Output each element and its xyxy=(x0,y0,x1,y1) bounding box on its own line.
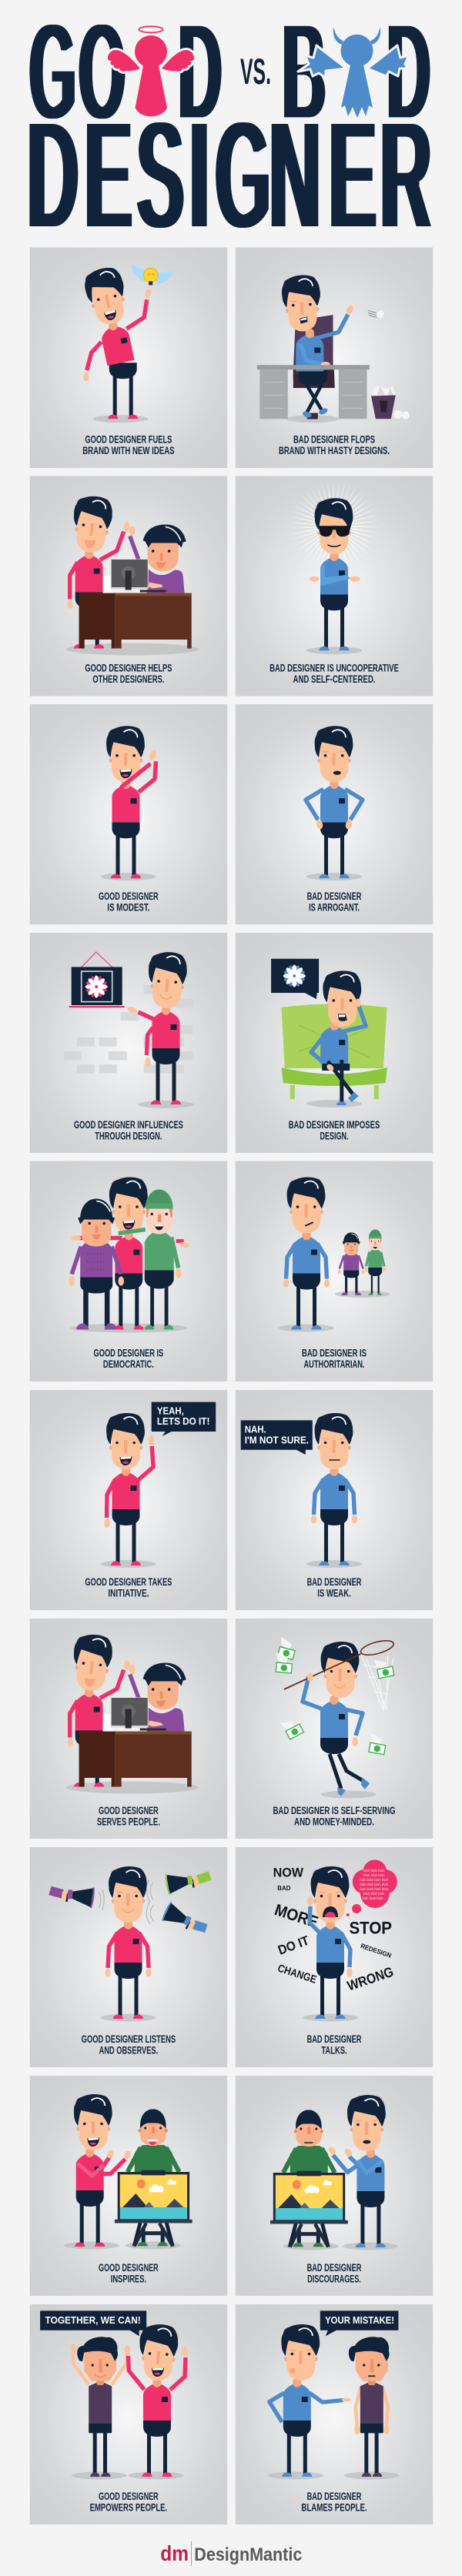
caption: IS MODEST. xyxy=(107,901,149,913)
caption: SERVES PEOPLE. xyxy=(97,1816,160,1827)
panel: bad designer imposes design xyxy=(236,933,433,1153)
caption: BRAND WITH HASTY DESIGNS. xyxy=(279,445,390,456)
caption: DESIGN. xyxy=(320,1130,348,1141)
scattered shouted words: REDESIGN xyxy=(360,1942,393,1960)
caption: BAD DESIGNER xyxy=(307,890,362,902)
caption: TALKS. xyxy=(321,2044,347,2056)
caption: IS ARROGANT. xyxy=(309,901,360,913)
caption: GOOD DESIGNER xyxy=(99,1805,159,1816)
speech bubble xyxy=(320,2310,398,2336)
caption: AND MONEY-MINDED. xyxy=(294,1816,374,1827)
logo: DesignMantic: DesignMantic xyxy=(194,2544,302,2565)
illustration: designer encouraging student at easel xyxy=(64,2094,192,2249)
panel: bad designer is uncooperative and self-centered xyxy=(236,476,433,696)
speech bubble: YOUR MISTAKE! xyxy=(325,2314,394,2326)
speech bubble: LETS DO IT! xyxy=(157,1415,209,1427)
caption: GOOD DESIGNER HELPS xyxy=(85,662,172,674)
panel: bad designer discourages xyxy=(236,2076,433,2296)
scattered shouted words: WRONG xyxy=(345,1964,395,1994)
caption: DISCOURAGES. xyxy=(307,2273,361,2284)
illustration: designer on green sofa xyxy=(271,959,387,1108)
illustration: two people celebrating xyxy=(70,2324,188,2480)
speech bubble: I'M NOT SURE. xyxy=(245,1434,309,1445)
caption: GOOD DESIGNER LISTENS xyxy=(82,2033,176,2045)
thought bubble with blah text: blah blah blah xyxy=(363,1869,385,1873)
panel: bad designer is self-serving and money-minded xyxy=(236,1619,433,1839)
caption xyxy=(307,890,362,913)
icon: light rays behind head xyxy=(302,494,367,559)
caption xyxy=(301,2491,367,2513)
caption xyxy=(90,2491,167,2513)
caption xyxy=(85,1576,172,1599)
caption xyxy=(82,434,175,456)
thought bubble with blah text xyxy=(346,1859,397,1916)
illustration: three designers together xyxy=(69,1178,190,1333)
caption: BAD DESIGNER xyxy=(307,2262,362,2274)
icon: megaphones xyxy=(48,1866,213,1940)
panel: bad designer is weak xyxy=(236,1390,433,1610)
caption: BAD DESIGNER xyxy=(307,2033,362,2045)
thought bubble with blah text: blah blah blah xyxy=(363,1873,385,1877)
scattered shouted words: CHANGE xyxy=(276,1962,318,1986)
icon: angel xyxy=(108,26,194,116)
panel: good designer serves people xyxy=(30,1619,227,1839)
caption: INITIATIVE. xyxy=(108,1587,149,1599)
scattered shouted words: MORE xyxy=(273,1901,320,1932)
caption: GOOD DESIGNER IS xyxy=(94,1347,163,1359)
thought bubble with blah text: blah blah blah blah xyxy=(360,1878,389,1882)
illustration: designer discouraging student at easel xyxy=(270,2095,398,2250)
caption xyxy=(74,1119,183,1141)
scattered shouted words: BAD xyxy=(277,1885,291,1892)
caption xyxy=(302,1347,367,1370)
caption xyxy=(270,662,399,685)
panel: good designer is modest xyxy=(30,704,227,924)
caption xyxy=(85,662,172,685)
caption xyxy=(99,2262,159,2284)
panel: good designer fuels brand with new ideas xyxy=(30,248,227,468)
panel: bad designer is authoritarian xyxy=(236,1161,433,1382)
panel: good designer inspires xyxy=(30,2076,227,2296)
caption: IS WEAK. xyxy=(317,1587,351,1599)
illustration: designer at desk throwing paper xyxy=(257,274,410,423)
illustration: designer raising hand xyxy=(101,1413,156,1568)
logo: DesignMantic: dm xyxy=(160,2541,189,2565)
caption: BAD DESIGNER IS UNCOOPERATIVE xyxy=(270,662,399,674)
caption xyxy=(94,1347,163,1370)
illustration: designer with sunglasses and crossed arms xyxy=(306,498,362,654)
heading word: DESIGNER: DESIGNER xyxy=(27,89,432,262)
caption: GOOD DESIGNER FUELS xyxy=(85,434,172,445)
caption xyxy=(99,890,159,913)
illustration: designer with flying bulb xyxy=(82,265,174,423)
illustration: tall designer and tiny colleagues xyxy=(279,1178,390,1331)
caption xyxy=(97,1805,160,1827)
speech bubble xyxy=(241,1420,313,1455)
icon: devil xyxy=(298,27,409,118)
illustration: high five at desk xyxy=(66,1632,199,1793)
caption xyxy=(82,2033,176,2056)
panel: good designer listens and observes xyxy=(30,1847,227,2067)
caption: THROUGH DESIGN. xyxy=(95,1130,162,1141)
illustration: designer chasing money with net xyxy=(274,1637,395,1798)
caption: BRAND WITH NEW IDEAS xyxy=(82,445,175,456)
caption: GOOD DESIGNER TAKES xyxy=(85,1576,172,1588)
scattered shouted words: STOP xyxy=(349,1918,392,1938)
panel: good designer influences through design xyxy=(30,933,227,1153)
scattered shouted words xyxy=(273,1866,395,1994)
illustration: high five at desk xyxy=(66,494,199,656)
scattered shouted words: NOW xyxy=(273,1866,304,1880)
caption: BAD DESIGNER xyxy=(307,2491,362,2502)
logo: DesignMantic xyxy=(160,2541,302,2566)
caption: BAD DESIGNER xyxy=(307,1576,362,1588)
illustration: talking designer xyxy=(303,1866,358,2021)
illustration: designer presenting artwork xyxy=(126,951,194,1108)
illustration: arrogant designer hands on hips xyxy=(306,726,363,880)
panel: bad designer is arrogant xyxy=(236,704,433,924)
speech bubble xyxy=(40,2310,146,2336)
speech bubble: TOGETHER, WE CAN! xyxy=(45,2314,141,2326)
panel: bad designer flops brand with hasty designs xyxy=(236,248,433,468)
speech bubble xyxy=(152,1402,216,1436)
illustration: hesitant designer xyxy=(306,1413,362,1568)
caption: BAD DESIGNER IS SELF-SERVING xyxy=(273,1805,395,1816)
thought bubble with blah text: blah blah blah blah xyxy=(360,1887,389,1891)
caption: BLAMES PEOPLE. xyxy=(301,2501,367,2513)
caption: GOOD DESIGNER xyxy=(99,890,159,902)
caption: BAD DESIGNER FLOPS xyxy=(293,434,375,445)
caption: AUTHORITARIAN. xyxy=(303,1358,364,1370)
caption xyxy=(289,1119,380,1141)
panel: good designer empowers people xyxy=(30,2304,227,2524)
speech bubble: NAH. xyxy=(245,1424,266,1435)
thought bubble with blah text: blah blah blah blah xyxy=(360,1883,389,1886)
panel: good designer is democratic xyxy=(30,1161,227,1382)
caption: GOOD DESIGNER xyxy=(99,2262,159,2274)
illustration: modest designer waving xyxy=(101,726,157,880)
panel: good designer takes initiative xyxy=(30,1390,227,1610)
caption: DEMOCRATIC. xyxy=(103,1358,154,1370)
title xyxy=(27,0,432,262)
heading word: VS.: VS. xyxy=(240,51,271,92)
caption: INSPIRES. xyxy=(111,2273,146,2284)
caption xyxy=(279,434,390,456)
illustration: designer pointing at colleague xyxy=(268,2324,400,2480)
illustration: listening designer xyxy=(100,1866,156,2021)
caption xyxy=(307,1576,362,1599)
caption xyxy=(273,1805,396,1827)
thought bubble with blah text: blah blah blah xyxy=(363,1892,385,1896)
panel: bad designer talks xyxy=(236,1847,433,2067)
thought bubble with blah text: blah blah blah... xyxy=(362,1896,386,1900)
caption: GOOD DESIGNER xyxy=(99,2491,159,2502)
illustration: framed flower artwork xyxy=(69,952,125,1007)
caption: OTHER DESIGNERS. xyxy=(92,673,164,685)
caption: AND SELF-CENTERED. xyxy=(293,673,375,685)
caption: BAD DESIGNER IMPOSES xyxy=(289,1119,380,1131)
panel: bad designer blames people xyxy=(236,2304,433,2524)
speech bubble: YEAH, xyxy=(157,1405,184,1417)
decorative wall bricks xyxy=(64,985,193,1073)
caption: AND OBSERVES. xyxy=(99,2044,158,2056)
caption: GOOD DESIGNER INFLUENCES xyxy=(74,1119,183,1131)
panel: good designer helps other designers xyxy=(30,476,227,696)
caption: EMPOWERS PEOPLE. xyxy=(90,2501,167,2513)
scattered shouted words: DO IT xyxy=(276,1933,311,1958)
caption xyxy=(307,2033,362,2056)
caption xyxy=(307,2262,362,2284)
caption: BAD DESIGNER IS xyxy=(302,1347,367,1359)
